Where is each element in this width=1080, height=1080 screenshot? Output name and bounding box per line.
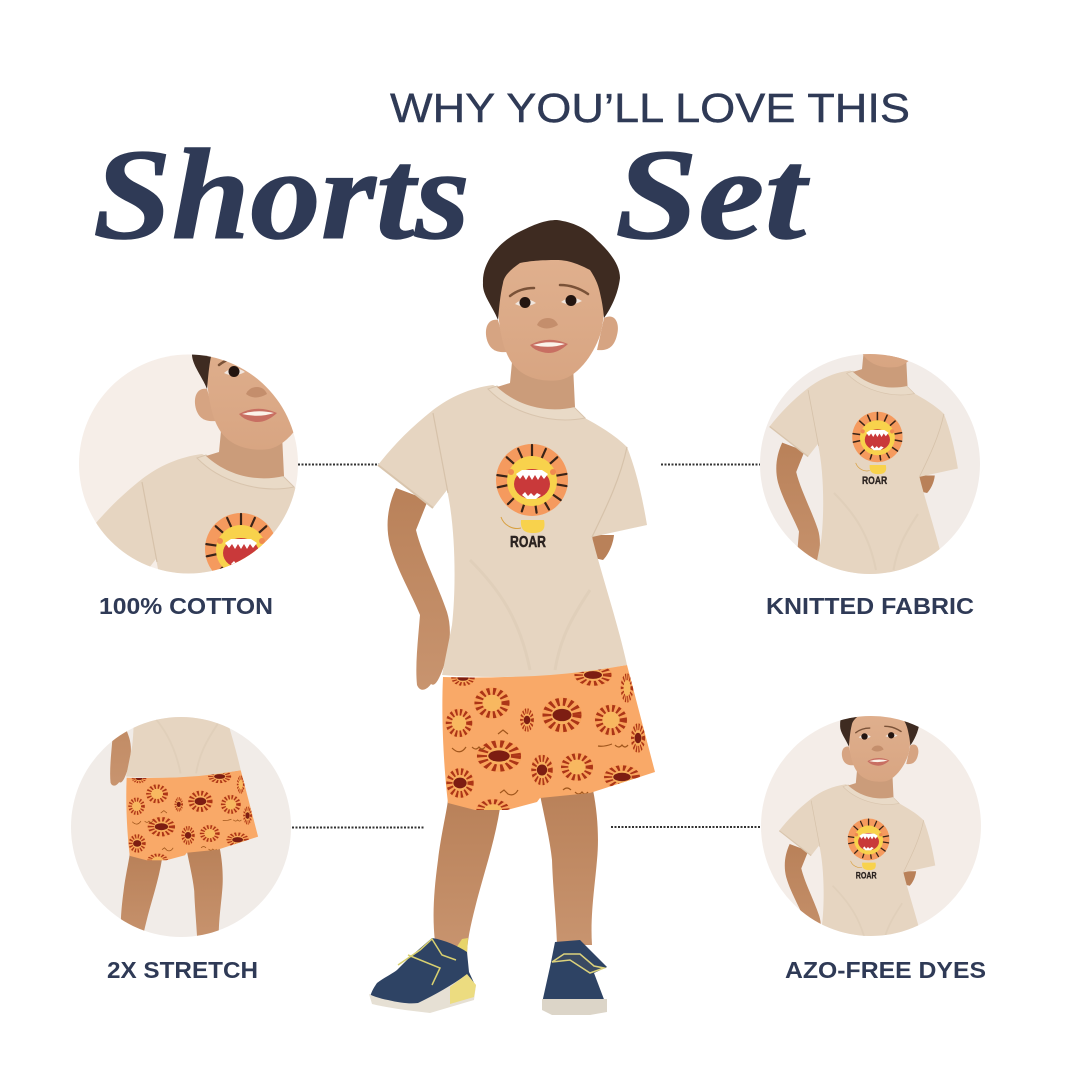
ears	[486, 320, 507, 352]
panel: knitted fabric	[760, 354, 980, 614]
main figure: boy in lion shorts set	[369, 220, 655, 1015]
label: 2x stretch: 2X STRETCH	[107, 957, 258, 983]
label: azo-free dyes: AZO-FREE DYES	[785, 957, 986, 983]
left shoe	[369, 938, 476, 1013]
left arm	[388, 488, 450, 690]
label: knitted fabric: KNITTED FABRIC	[766, 593, 974, 619]
eyes	[515, 295, 582, 308]
connector: cotton	[298, 464, 380, 466]
title: Set: Set	[615, 123, 810, 267]
right shoe	[542, 940, 607, 1015]
connector: knitted	[661, 464, 760, 466]
neck	[497, 362, 575, 409]
shorts	[442, 664, 655, 821]
label: 100% cotton: 100% COTTON	[99, 593, 273, 619]
lion graphic	[496, 444, 568, 516]
eyebrows	[510, 285, 588, 296]
legs and shoes	[369, 790, 607, 1015]
connector: azo-free	[611, 826, 776, 828]
subtitle: why you'll love this: WHY YOU’LL LOVE THIS	[390, 85, 910, 131]
panel: 100% cotton	[79, 354, 298, 614]
circle photo: azo-free	[761, 716, 981, 936]
left leg	[434, 800, 500, 952]
roar text: ROAR	[510, 534, 546, 551]
panel: 2x stretch	[71, 717, 291, 978]
nose	[537, 318, 558, 328]
panel: azo-free dyes	[761, 716, 986, 978]
hair	[483, 220, 620, 320]
title: Shorts: Shorts	[93, 123, 470, 267]
t-shirt	[378, 385, 647, 677]
connector: stretch	[292, 826, 424, 828]
circle photo: stretch	[71, 717, 291, 937]
right arm behind	[592, 535, 614, 560]
circle photo: cotton	[79, 354, 298, 574]
mouth	[530, 340, 568, 353]
right leg	[540, 790, 598, 945]
lion body	[521, 520, 545, 533]
upper body	[378, 220, 655, 821]
shorts lion print	[445, 664, 645, 821]
circle photo: knitted	[760, 354, 980, 574]
face	[497, 255, 604, 381]
